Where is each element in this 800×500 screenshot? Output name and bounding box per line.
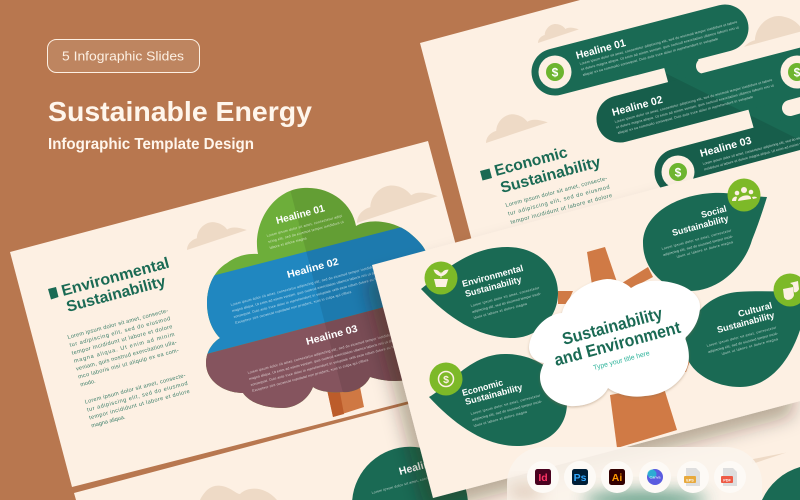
panel: environmental sustainability slide <box>10 141 492 487</box>
text: healine 01: Lorem ipsum dolor sit amet, consectetur adipiscing elit, sed do eiusmod tempor incididunt ut labore <box>579 20 738 66</box>
leaf: economic: Sustainability <box>464 382 524 407</box>
text: environmental body: tur adipiscing elit, sed do eiusmod <box>69 316 171 349</box>
text: environmental body: mco laboris nisi ut aliquip ex ea com- <box>78 348 180 381</box>
leaf: social: Social <box>700 204 728 220</box>
leaf: social: idunt ut labore et dolore magna <box>676 240 733 259</box>
text: tree healine 03: consequat. Duis aute irure dolor in reprehenderit in voluptate velit esse cillum dolore eu fugiat <box>250 343 401 387</box>
toolbar: software icons <box>507 447 762 500</box>
text: environmental body: tur adipiscing elit, sed do eiusmod <box>86 381 188 414</box>
text: tree healine 02: Excepteur sint occaecat cupidatat non proident, sunt in culpa qui officia <box>235 290 352 325</box>
connected pills <box>555 28 800 250</box>
text: economic body: tur adipiscing elit, sed do eiusmod <box>507 184 610 217</box>
text: healine 03: Healine 03 <box>699 135 753 160</box>
leaf: cultural: Sustainability <box>716 310 776 335</box>
leaf: economic: Lorem ipsum dolor sit amet, consectetur <box>470 393 542 416</box>
panel: bottom slide: that tempor incididunt ut labore et dolore <box>711 399 800 429</box>
icon: canva: Canva <box>650 476 661 480</box>
text: economic body: tempor incididunt ut labore et dolore <box>510 193 613 226</box>
leaf: economic: idunt ut labore et dolore magna <box>473 410 527 428</box>
text: tree healine 01: labore et dolore magna <box>269 236 307 250</box>
text: tree healine 01: Healine 01 <box>275 203 326 227</box>
text: environmental body: Lorem ipsum dolor sit amet, consecte- <box>84 373 186 406</box>
text: healine 02: et dolore magna aliqua. Ut enim ad minim veniam, quis nostrud exercitation ullamco laboris nisi ut <box>616 83 774 129</box>
leaf: environmental: idunt ut labore et dolore magna <box>473 302 527 320</box>
icon: eps file: EPS <box>686 478 694 482</box>
icon: indesign: Id <box>538 472 548 484</box>
text: environmental body: tempor incididunt ut labore et dolore <box>71 324 173 357</box>
text: environmental body <box>67 308 193 429</box>
text: environmental body: magna aliqua. Ut enim ad minim <box>73 332 176 365</box>
cloud decorations <box>182 174 439 250</box>
panel: sustainability and environment slide <box>372 150 800 498</box>
text: healine 01: Healine 01 <box>575 37 627 62</box>
panel: bottom slide: Lorem ipsum dolor sit amet, consectetur <box>371 473 441 495</box>
text: tree healine 01: scing elit, sed do eiusmod tempor incididunt ut <box>268 220 344 244</box>
text: environmental body: veniam, quis nostrud exercitation ulla- <box>75 340 178 373</box>
heading: environmental sustainability: Environmental <box>60 255 171 300</box>
text: healine 01: aliquip ex ea commodo consequat. Duis aute irure dolor in reprehenderit in voluptate <box>582 37 719 77</box>
text: tree healine 02: Lorem ipsum dolor sit amet, consectetur adipiscing elit, sed do eiusmod tempor incididunt ut <box>230 263 381 307</box>
text: environmental body: modo. <box>80 379 97 388</box>
text: healine 02: aliquip ex ea commodo consequat. Duis aute irure dolor in reprehenderit in voluptate <box>617 95 754 135</box>
subtitle: Infographic Template Design <box>48 136 254 153</box>
icon: indesign <box>527 461 559 493</box>
text: economic body <box>505 176 613 226</box>
icon: eps file <box>677 461 709 493</box>
icon: theatre masks <box>774 274 800 306</box>
leaf: economic <box>429 354 567 446</box>
text: tree healine 01: Lorem ipsum dolor sit amet, consectetur adipi <box>266 214 343 238</box>
icon: plant pot <box>424 262 458 294</box>
text: tree healine 02: magna aliqua. Ut enim ad minim veniam, quis nostrud exercitation ullamco laboris nisi ut aliquip <box>232 269 383 313</box>
icon: photoshop <box>564 461 596 493</box>
leaf: cultural: adipiscing elit, sed do eiusmod tempor incid- <box>708 331 778 354</box>
icon: canva <box>639 461 671 493</box>
text: tree healine 02 <box>230 256 384 325</box>
icon: illustrator: Ai <box>612 472 622 484</box>
callout: central cloud: Sustainability <box>560 304 665 349</box>
leaf: social: adipiscing elit, sed do eiusmod tempor incid- <box>663 234 733 257</box>
icon: illustrator <box>601 461 633 493</box>
leaf: social <box>643 193 767 291</box>
title: Sustainable Energy <box>48 96 312 127</box>
leaf: cultural: Cultural <box>737 300 773 319</box>
icon: dollar 3 <box>662 156 694 188</box>
text: tree healine 03: magna aliqua. Ut enim ad minim veniam, quis nostrud exercitation ullamco laboris nisi ut aliquip <box>249 337 400 381</box>
heading: environmental sustainability: Sustainability <box>65 273 168 316</box>
icon: dollar 3: $ <box>675 166 682 180</box>
text: tree healine 02: consequat. Duis aute irure dolor in reprehenderit in voluptate velit esse cillum dolore eu fugiat <box>233 275 384 319</box>
icon: pdf file <box>714 461 746 493</box>
icon: dollar circle: $ <box>443 374 449 386</box>
icon: dollar 2 <box>780 56 800 88</box>
heading: economic sustainability <box>480 144 603 197</box>
leaf: environmental <box>421 247 558 338</box>
leaf: cultural: idunt ut labore et dolore magna <box>721 337 778 356</box>
icon: pdf file: PDF <box>723 478 731 482</box>
icon: dollar 1: $ <box>552 66 559 80</box>
text: healine 02: Healine 02 <box>611 94 664 119</box>
leaf: cultural <box>685 290 800 387</box>
text: tree healine 03: Excepteur sint occaecat cupidatat non proident, sunt in culpa qui officia <box>252 358 369 393</box>
cloud decorations <box>480 3 800 143</box>
badge: 5 infographic slides <box>48 40 200 72</box>
text: tree healine 02: Healine 02 <box>286 256 340 281</box>
text: tree healine 01 <box>266 203 344 250</box>
callout: central cloud: and Environment <box>552 318 683 370</box>
chart: tree trunk <box>326 377 364 417</box>
leaf: environmental: Sustainability <box>464 274 523 299</box>
leaf: environmental: Lorem ipsum dolor sit amet, consectetur <box>470 286 541 308</box>
icon: dollar 1 <box>538 56 572 88</box>
text: environmental body: tempor incididunt ut labore et dolore <box>89 389 191 421</box>
icon: people <box>728 178 760 212</box>
leaf: environmental: adipiscing elit, sed do eiusmod tempor incid- <box>472 292 541 314</box>
panel: economic sustainability slide <box>420 0 800 500</box>
leaf: cultural: Lorem ipsum dolor sit amet, consectetur <box>706 325 778 348</box>
icon: photoshop: Ps <box>574 472 587 484</box>
text: tree healine 03: Healine 03 <box>305 323 359 348</box>
icon: heading marker <box>48 287 58 300</box>
text: healine 01: et dolore magna aliqua. Ut enim ad minim veniam, quis nostrud exercitation ullamco laboris nisi ut <box>581 25 739 71</box>
panel: bottom slide: Sustainability <box>580 424 685 468</box>
chart: tree crown bands <box>206 188 426 408</box>
text: tree healine 03: Lorem ipsum dolor sit amet, consectetur adipiscing elit, sed do eiusmod tempor incididunt ut <box>247 331 398 375</box>
text: healine 02: Lorem ipsum dolor sit amet, consectetur adipiscing elit, sed do eiusmod tempor incididunt ut labore <box>614 78 773 124</box>
tree trunk and branches <box>558 247 692 448</box>
leaf: social: Sustainability <box>671 213 730 238</box>
panel: bottom slide <box>74 300 800 500</box>
callout: central cloud: Type your title here <box>593 350 651 372</box>
leaf: economic: Economic <box>461 377 504 398</box>
leaf: economic: adipiscing elit, sed do eiusmod tempor incid- <box>472 399 542 422</box>
badge: 5 infographic slides: 5 Infographic Slides <box>62 48 185 64</box>
leaf: social: Lorem ipsum dolor sit amet, consectetur <box>661 228 733 251</box>
text: tree healine 03 <box>247 323 401 393</box>
text: environmental body: magna aliqua. <box>91 414 127 429</box>
text: economic body: Lorem ipsum dolor sit amet, consecte- <box>505 176 608 209</box>
heading: economic sustainability: Economic <box>493 144 570 180</box>
text: environmental body: Lorem ipsum dolor sit amet, consecte- <box>67 308 169 341</box>
callout: central cloud <box>529 279 700 406</box>
heading: economic sustainability: Sustainability <box>499 154 603 197</box>
leaf: environmental: Environmental <box>461 263 524 289</box>
panel: bottom slide: Healine 04 <box>398 453 451 478</box>
icon: dollar circle <box>430 362 462 396</box>
